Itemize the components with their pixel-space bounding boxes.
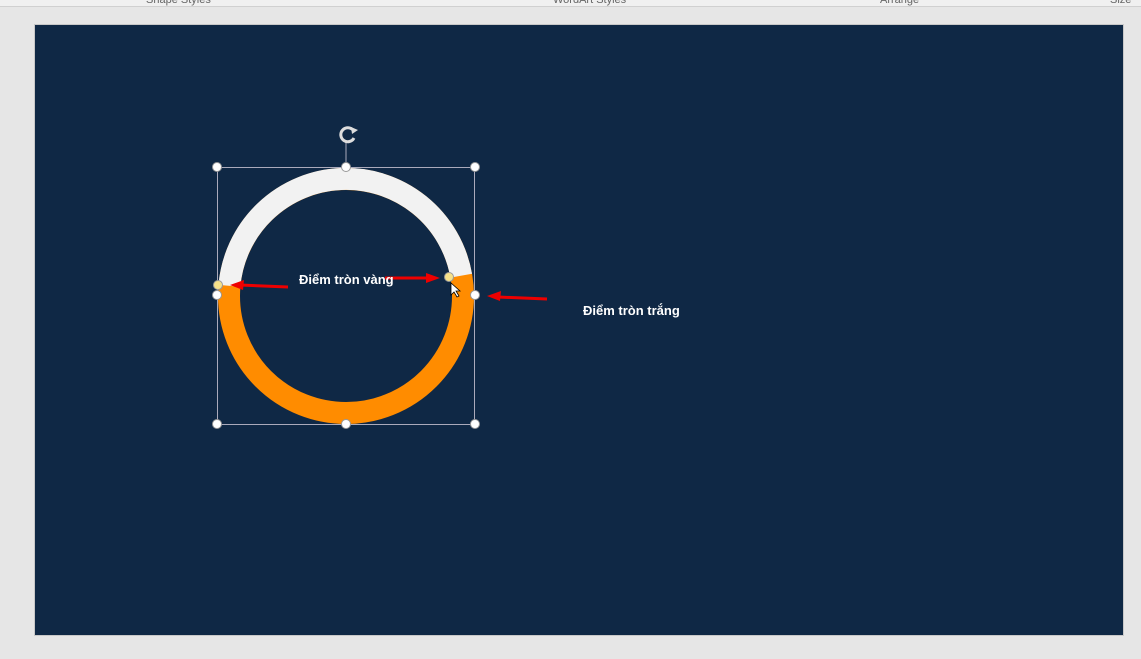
label: white point: Điểm tròn trắng bbox=[583, 303, 680, 318]
orange ring bbox=[229, 179, 463, 413]
arrow: left yellow bbox=[230, 280, 288, 290]
white arc bbox=[229, 179, 461, 286]
cursor bbox=[451, 283, 460, 297]
label: yellow point: Điểm tròn vàng bbox=[299, 272, 394, 287]
ribbon strip bbox=[0, 0, 1141, 7]
selection box with handles bbox=[212, 127, 480, 428]
arrow: right yellow bbox=[385, 273, 440, 283]
arrow: white point bbox=[487, 291, 547, 301]
